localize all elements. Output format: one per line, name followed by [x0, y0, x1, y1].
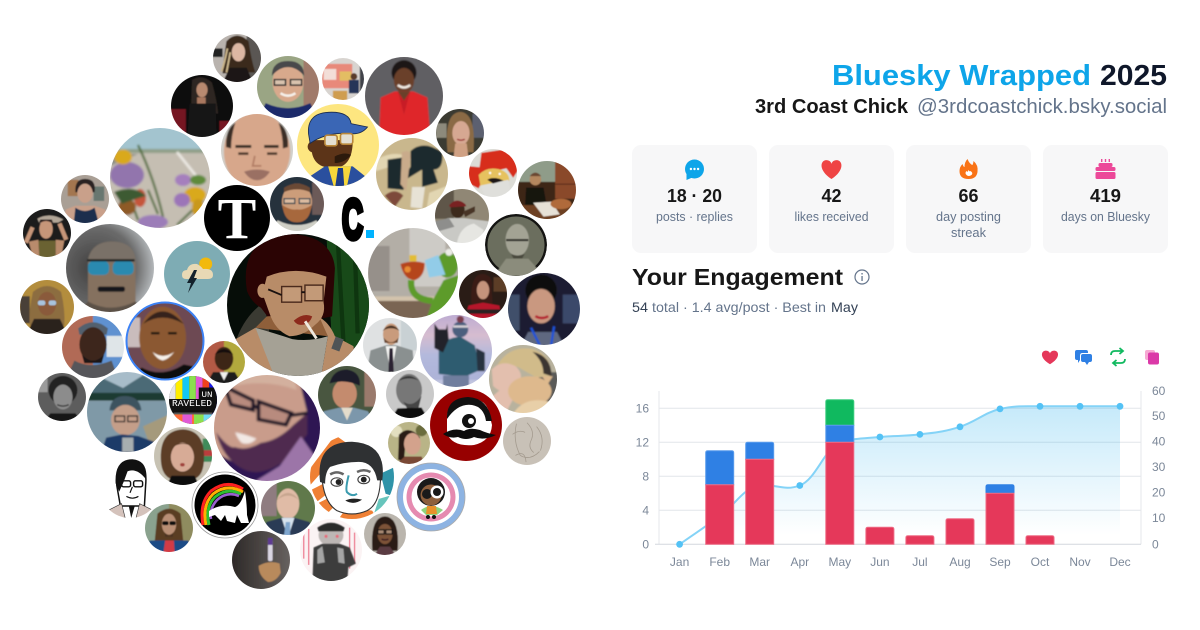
avatar: smiling man with blue ring — [126, 302, 204, 380]
avatar: rainbow raccoon logo — [192, 472, 258, 538]
month labels: Aug — [949, 555, 971, 569]
avatar: grey sketch figure with pink stripes — [300, 519, 362, 581]
bars: stacked monthly counts — [706, 400, 1054, 544]
icon: likes — [1042, 351, 1058, 364]
month labels: Jan — [670, 555, 689, 569]
engagement summary: total · 1.4 avg/post · Best in — [652, 299, 826, 315]
left axis labels: 12 — [636, 436, 649, 450]
avatar: Unraveled logo: UN — [202, 390, 212, 400]
avatar: black and white bald bearded man — [386, 370, 434, 418]
panel: stat cards — [632, 145, 1168, 253]
header: title and handle — [755, 60, 1167, 118]
bar: Sep — [986, 485, 1014, 544]
avatar: woman seated at a booth with papers — [515, 158, 579, 222]
month labels: Feb — [709, 555, 730, 569]
avatar: hand holding a vial — [232, 531, 290, 589]
title: Bluesky Wrapped — [832, 60, 1091, 92]
card: posts and replies — [632, 145, 757, 253]
avatar: woman with flowers behind — [388, 422, 430, 464]
card: days on Bluesky — [1043, 145, 1168, 253]
avatar: Kermit sipping tea with a mask — [364, 224, 462, 323]
avatar: blonde woman cuddling a cat — [489, 345, 557, 413]
card: day posting streak: 66 — [958, 186, 978, 206]
card: posts and replies: posts · replies — [656, 210, 733, 224]
avatar: cartoon man in UVA cap on yellow — [297, 104, 379, 186]
left axis labels: 0 — [642, 538, 649, 552]
avatar: young man in suit — [203, 341, 245, 383]
month labels: Jun — [870, 555, 890, 569]
month labels: May — [828, 555, 851, 569]
avatar: man in red cap and white hoodie — [432, 186, 492, 246]
icon: reposts — [1111, 348, 1125, 366]
month labels — [670, 555, 1131, 569]
avatar: sepia portrait of bald man — [485, 214, 547, 276]
avatar: Peggy Hill cartoon — [227, 234, 369, 376]
avatar: wildflowers on a road — [110, 128, 210, 228]
avatar: woman in black dress — [171, 75, 233, 137]
card: likes received: likes received — [794, 210, 869, 224]
card: days on Bluesky: days on Bluesky — [1061, 210, 1151, 224]
bar: Feb — [706, 451, 734, 544]
month labels: Oct — [1031, 555, 1050, 569]
avatar: pencil sketch face — [503, 417, 551, 465]
card: day posting streak — [906, 145, 1031, 253]
left axis labels: 16 — [636, 402, 649, 416]
avatar: woman in navy tank top — [61, 175, 109, 223]
avatar: weather app logo — [164, 241, 230, 307]
title: 2025 — [1100, 60, 1167, 92]
avatar: woman in red blazer — [365, 57, 443, 135]
card: likes received — [769, 145, 894, 253]
avatar: Unraveled logo — [169, 376, 217, 424]
avatar: woman with long brown hair — [436, 109, 484, 157]
area under cumulative line — [680, 406, 1120, 544]
avatar: bearded man in grey suit — [363, 318, 417, 372]
avatar: man in grey hoodie — [62, 316, 124, 378]
card: days on Bluesky: 419 — [1090, 186, 1121, 206]
display name and handle: 3rd Coast Chick — [755, 96, 909, 118]
left axis labels: 8 — [642, 470, 649, 484]
avatar: smiling person in cap and denim — [318, 366, 376, 424]
card: day posting streak: day posting — [936, 210, 1001, 224]
bar: Mar — [746, 442, 774, 544]
avatar: New York Times logo: T — [218, 186, 256, 251]
avatar: woman with braids and blue glasses — [20, 280, 74, 334]
right axis labels: 50 — [1152, 409, 1166, 423]
engagement summary: 54 — [632, 299, 648, 315]
line data points — [676, 403, 1123, 548]
right axis labels: 30 — [1152, 460, 1166, 474]
avatar: smiling man with dark glasses, purple tones — [214, 375, 320, 481]
month labels: Nov — [1069, 555, 1091, 569]
right axis labels: 60 — [1152, 384, 1166, 398]
right axis labels: 0 — [1152, 538, 1159, 552]
month labels: Jul — [912, 555, 928, 569]
heading: Your Engagement: Your Engagement — [632, 264, 843, 290]
avatar: Natty Boh logo — [430, 389, 502, 461]
chart: monthly engagement with cumulative line — [636, 384, 1166, 569]
month labels: Sep — [989, 555, 1011, 569]
icon: replies — [1075, 350, 1092, 365]
engagement summary: May — [831, 299, 858, 315]
month labels: Apr — [790, 555, 809, 569]
month labels: Mar — [749, 555, 770, 569]
avatar: woman with hands raised — [23, 209, 71, 257]
chart legend icons — [1042, 348, 1159, 366]
bar: May — [826, 400, 854, 544]
avatar: woman with long hair — [213, 34, 261, 82]
panel: avatar cluster — [17, 32, 584, 592]
grid and axes — [655, 391, 1141, 544]
bar: Oct — [1026, 536, 1054, 544]
avatar: speaker beside projector screen — [322, 58, 364, 100]
avatar: news anchor in red — [457, 268, 509, 320]
right axis labels — [1152, 384, 1166, 552]
avatar: New York Times logo — [204, 185, 270, 251]
month labels: Dec — [1109, 555, 1131, 569]
avatar: person in winter coat holding a cat — [420, 315, 492, 387]
right axis labels: 20 — [1152, 486, 1166, 500]
bar: Jul — [906, 536, 934, 544]
avatar: woman with curly hair — [154, 427, 212, 485]
avatar: illustrated portrait with orange and teal — [310, 437, 394, 519]
avatar: man with long hair and sunglasses — [145, 504, 193, 552]
avatar: cartoon character with red hair — [467, 147, 519, 200]
logo: C with blue square — [342, 190, 374, 251]
card: day posting streak: streak — [951, 226, 987, 240]
card: likes received: 42 — [822, 186, 842, 206]
left axis labels — [636, 402, 649, 552]
right axis labels: 10 — [1152, 511, 1166, 525]
right axis labels: 40 — [1152, 434, 1166, 448]
avatar: black and white portrait of woman — [38, 373, 86, 421]
avatar: bearded man with glasses — [270, 177, 324, 231]
left axis labels: 4 — [642, 504, 649, 518]
cumulative line — [680, 406, 1120, 544]
avatar: bald man in suit against greenery — [261, 481, 315, 535]
bar: Jun — [866, 527, 894, 544]
display name and handle — [755, 96, 1167, 118]
avatar: Powerpuff Girl in pink and blue rings — [397, 463, 465, 531]
avatar: vintage map with figure — [376, 138, 448, 210]
bar: Aug — [946, 519, 974, 544]
avatar: bald man close-up — [221, 114, 293, 186]
avatar: woman with blue lanyard — [508, 273, 580, 345]
avatar: man by mountain lake — [87, 372, 167, 452]
card: posts and replies: 18 · 20 — [667, 186, 722, 206]
avatar: Unraveled logo: RAVELED — [172, 399, 212, 409]
avatar: smiling man with glasses — [257, 56, 319, 118]
logo: C with blue square: C — [342, 190, 363, 251]
display name and handle: @3rdcoastchick.bsky.social — [917, 96, 1167, 118]
avatar: woman with curly hair and glasses — [364, 513, 406, 555]
avatar: ink sketch of man with glasses — [109, 459, 152, 518]
icon: quotes — [1145, 350, 1159, 364]
avatar: man in grey hat and blue sunglasses — [66, 224, 154, 312]
